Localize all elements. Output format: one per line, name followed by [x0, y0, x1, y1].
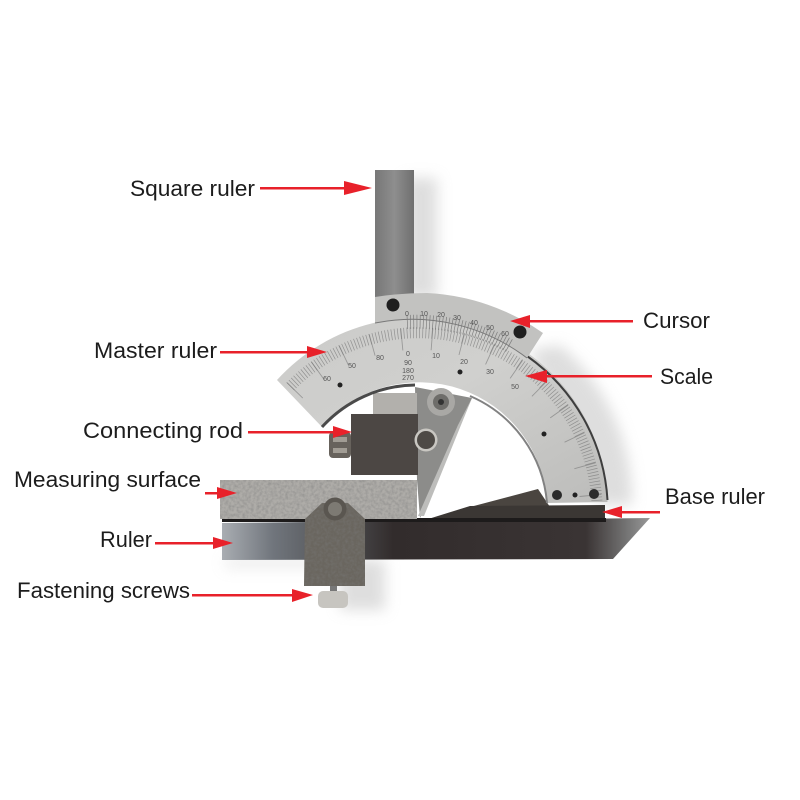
upper block	[373, 393, 417, 415]
label: connecting rod: Connecting rod	[83, 418, 243, 443]
master scale numbers: 270	[402, 375, 414, 382]
labels and arrows	[14, 176, 765, 603]
label: cursor: Cursor	[643, 308, 710, 333]
base ruler upper band	[425, 505, 605, 520]
right outer dark edge	[527, 356, 608, 500]
label: base ruler: Base ruler	[665, 484, 765, 509]
master scale numbers: 20	[460, 359, 468, 366]
inner arc edge right	[470, 396, 547, 503]
inner arc edge	[322, 385, 415, 427]
master scale numbers	[323, 351, 519, 391]
cursor scale ticks	[407, 322, 510, 346]
soft photo shadows	[225, 178, 632, 610]
arm screw	[414, 428, 438, 452]
wedge behind base ruler	[470, 489, 550, 507]
square ruler	[375, 170, 414, 300]
connecting rod screw	[329, 432, 351, 458]
master scale numbers: 90	[404, 360, 412, 367]
label: base ruler	[602, 484, 765, 518]
cursor scale numbers: 10	[420, 311, 428, 318]
label: master ruler	[94, 338, 327, 363]
clamp plate	[304, 503, 365, 586]
blade groove	[222, 518, 606, 522]
cursor scale numbers	[405, 311, 509, 338]
master ruler	[277, 318, 608, 503]
cursor scale numbers: 60	[501, 331, 509, 338]
cursor scale numbers: 50	[486, 325, 494, 332]
cursor scale numbers: 30	[453, 315, 461, 322]
cursor scale numbers: 20	[437, 312, 445, 319]
label: scale	[525, 364, 713, 389]
cursor	[375, 293, 543, 358]
master ruler holes	[338, 370, 578, 498]
master scale numbers: 80	[376, 355, 384, 362]
master scale numbers: 50	[511, 384, 519, 391]
connecting block	[351, 414, 418, 475]
angle gauge	[220, 170, 650, 608]
master scale ticks	[290, 333, 597, 503]
clamp plate texture	[304, 503, 365, 586]
cursor edge line	[375, 319, 527, 358]
ruler blade	[222, 518, 650, 560]
label: measuring surface: Measuring surface	[14, 467, 201, 492]
label: fastening screws: Fastening screws	[17, 578, 190, 603]
clamp screw	[324, 498, 346, 520]
master scale numbers: 180	[402, 368, 414, 375]
cursor screw right	[514, 326, 526, 338]
light arm facet	[418, 398, 472, 516]
label: square ruler: Square ruler	[130, 176, 255, 201]
label: fastening screws	[17, 578, 313, 603]
label: ruler: Ruler	[100, 527, 152, 552]
master scale numbers: 50	[348, 363, 356, 370]
master scale numbers: 10	[432, 353, 440, 360]
cursor screw left	[386, 298, 400, 312]
label: scale: Scale	[660, 364, 713, 389]
master scale numbers: 30	[486, 369, 494, 376]
label: ruler	[100, 527, 233, 552]
master scale numbers: 60	[323, 376, 331, 383]
pivot arm	[415, 387, 472, 518]
master scale numbers: 0	[406, 351, 410, 358]
label: cursor	[510, 308, 710, 333]
fastening knob	[318, 586, 348, 608]
cursor scale numbers: 0	[405, 311, 409, 318]
label: square ruler	[130, 176, 372, 201]
label: connecting rod	[83, 418, 352, 443]
label: master ruler: Master ruler	[94, 338, 217, 363]
pivot screw	[427, 388, 455, 416]
cursor scale numbers: 40	[470, 320, 478, 327]
measuring surface texture	[220, 480, 417, 519]
base screws	[552, 489, 599, 500]
label: measuring surface	[14, 467, 237, 499]
measuring surface	[220, 480, 417, 519]
